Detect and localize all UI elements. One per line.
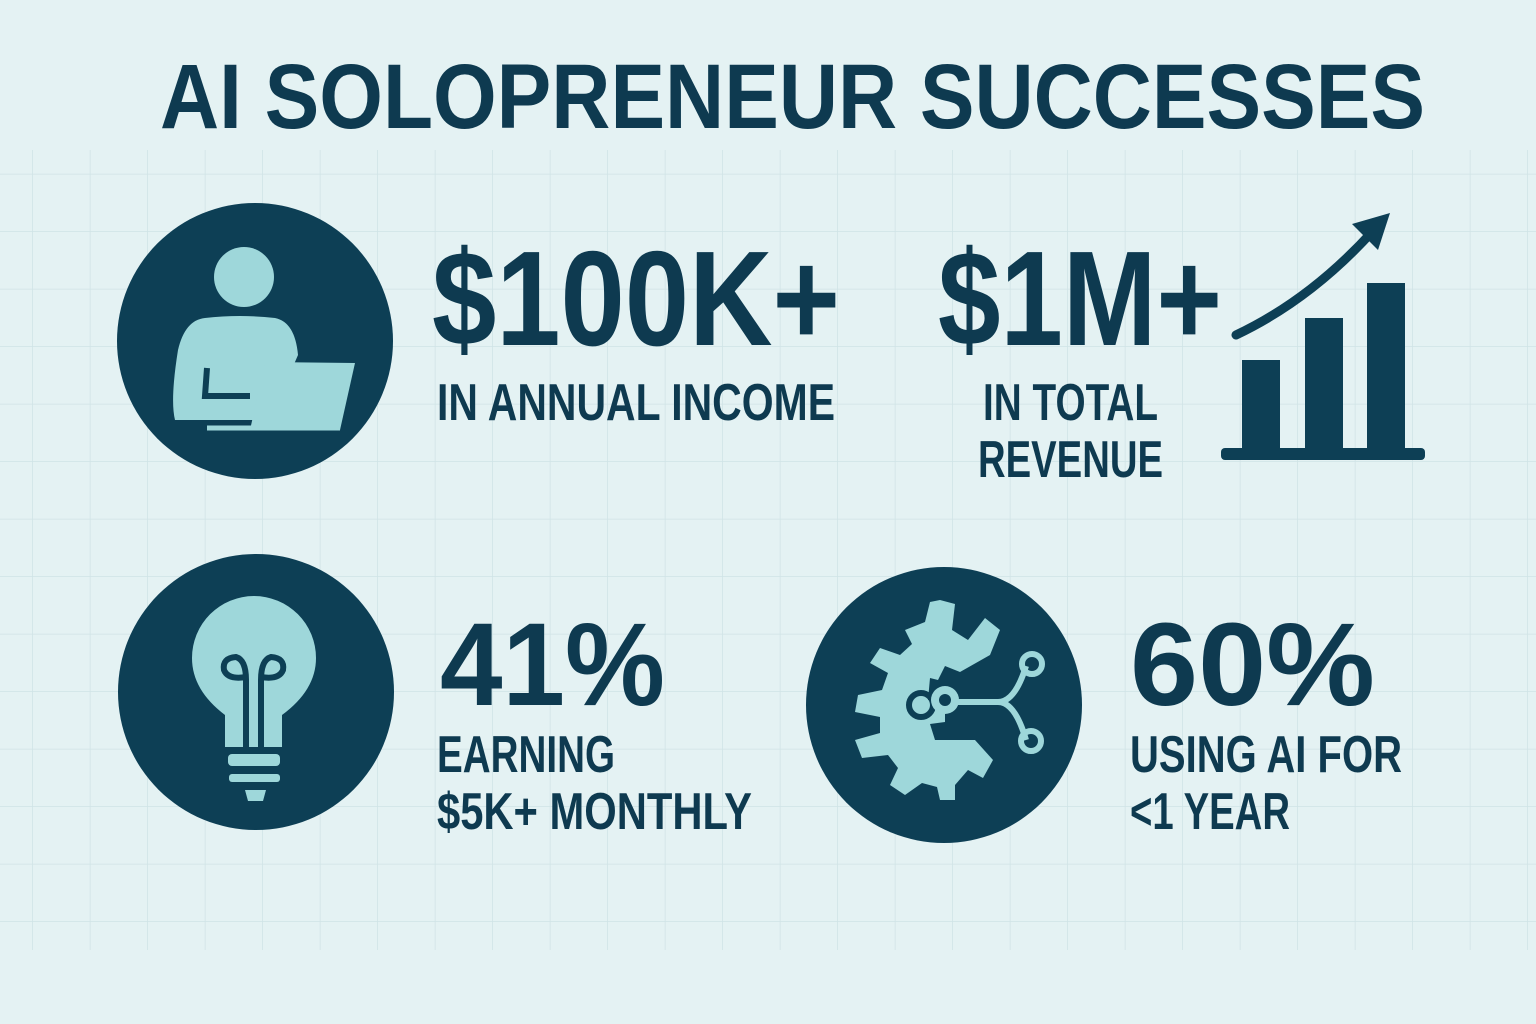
stat: 60%: 60%: [1130, 599, 1375, 731]
stat: $1M+: $1M+: [938, 223, 1222, 374]
icon: bar chart with arrow: [1221, 213, 1425, 460]
stat: $100K+: $100K+: [432, 223, 840, 374]
stat: 41%: EARNING: [437, 726, 615, 784]
stat: 60%: [1130, 599, 1402, 841]
stat: $100K+: IN ANNUAL INCOME: [437, 374, 835, 432]
stat: 60%: <1 YEAR: [1130, 783, 1290, 841]
icon: person with laptop: [117, 203, 393, 479]
icon: lightbulb: [118, 554, 394, 830]
stat: $1M+: [938, 223, 1222, 489]
stat: $1M+: IN TOTAL: [983, 374, 1158, 432]
stat: $100K+: [432, 223, 840, 432]
icon: gear with circuit: [806, 567, 1082, 843]
stat: $1M+: REVENUE: [978, 431, 1163, 489]
stat: 41%: 41%: [440, 599, 665, 731]
stat: 41%: [437, 599, 752, 841]
stat: 60%: USING AI FOR: [1130, 726, 1402, 784]
stat: 41%: $5K+ MONTHLY: [437, 783, 752, 841]
